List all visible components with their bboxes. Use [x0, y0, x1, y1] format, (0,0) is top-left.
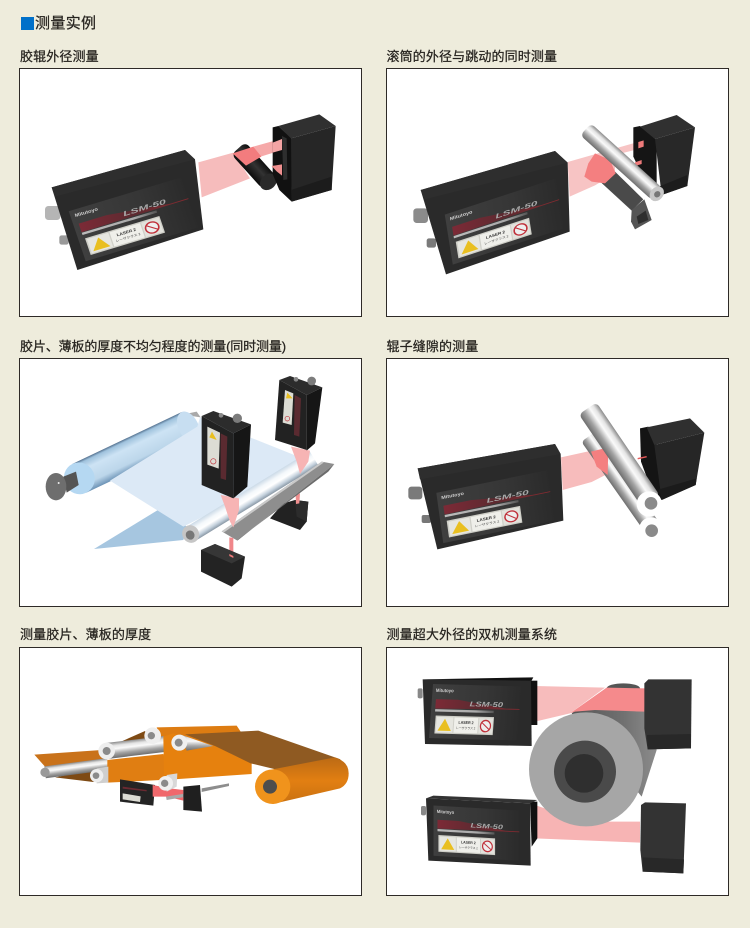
sensor top faceplate [429, 683, 521, 740]
bottom beam [534, 804, 640, 842]
heading: panel 5: 测量胶片、薄板的厚度 [20, 627, 151, 642]
model: LSM-50 [121, 197, 168, 217]
beam overlap [232, 146, 261, 165]
lower film wedge [94, 506, 186, 548]
panel: drum outer diameter and runout [386, 68, 729, 317]
panel: roller gap [386, 358, 729, 607]
roller D [90, 766, 108, 783]
brand: Mitutoyo [441, 491, 464, 501]
connectors [413, 208, 436, 247]
brand: Mitutoyo [436, 808, 454, 815]
film roll [58, 407, 204, 499]
receiver front [200, 544, 244, 586]
brand: Mitutoyo [435, 687, 454, 693]
roller [231, 142, 280, 193]
front beam lower [229, 537, 233, 556]
sensor faceplate [444, 178, 563, 264]
title text: 测量实例 [35, 15, 96, 32]
warning label: レーザクラス 2 [455, 724, 475, 730]
laser beam [198, 138, 282, 197]
panel: film thickness uniformity [19, 358, 362, 607]
sensor bottom faceplate [433, 805, 519, 860]
large cylinder body [571, 684, 656, 796]
roller F [158, 773, 177, 791]
warning label: LASER 2 [485, 229, 505, 239]
upper orange film [156, 725, 244, 753]
roller B [97, 735, 165, 760]
connector top [417, 688, 422, 698]
brown upper sheet [184, 730, 340, 770]
panel: dual sensor large diameter [386, 647, 729, 896]
silver roller [580, 123, 666, 203]
warning label: レーザクラス 2 [114, 231, 141, 243]
connector bottom [420, 806, 426, 815]
roller E [171, 734, 213, 750]
panel: film thickness [19, 647, 362, 896]
heading: panel 1: 胶辊外径测量 [20, 49, 99, 64]
warning label: LASER 2 [115, 227, 137, 237]
heading: panel 6: 测量超大外径的双机测量系统 [386, 627, 557, 642]
model: LSM-50 [469, 700, 503, 709]
warning label [455, 217, 531, 258]
warning label: レーザクラス 2 [474, 518, 499, 528]
beam overlap [584, 153, 615, 183]
sensor front vertical [201, 410, 250, 498]
model: LSM-50 [485, 488, 529, 504]
model: LSM-50 [470, 822, 503, 831]
warning label: LASER 2 [458, 720, 473, 725]
front roller [178, 450, 318, 546]
upper beams [220, 446, 310, 527]
rear beam lower [295, 493, 300, 504]
left film sheet [34, 730, 148, 782]
receiver [633, 114, 694, 194]
title: 测量实例 [21, 15, 96, 32]
back roller cap [638, 517, 662, 541]
sensor body [51, 150, 203, 270]
receiver bottom [640, 802, 686, 873]
sensor rear vertical [274, 376, 322, 450]
brand: Mitutoyo [449, 209, 472, 222]
heading: panel 4: 辊子缝隙的测量 [386, 339, 478, 354]
connectors [408, 486, 430, 522]
back roller [581, 431, 658, 531]
receiver top [644, 679, 691, 749]
brand: Mitutoyo [74, 206, 98, 218]
sensor body [420, 150, 569, 274]
warning label: LASER 2 [476, 514, 496, 522]
front roller cap [636, 491, 662, 516]
small beam [152, 784, 183, 800]
warning label: LASER 2 [461, 840, 475, 845]
warning label: レーザクラス 2 [458, 844, 478, 850]
receiver [272, 114, 335, 201]
sensor faceplate [436, 470, 554, 543]
sensor bottom body [426, 795, 537, 865]
icon: blue square [21, 17, 34, 30]
orange roll [254, 757, 348, 804]
small receiver and shaft [166, 783, 228, 811]
panel: roller outer diameter [19, 68, 362, 317]
receiver [637, 418, 704, 500]
front orange sheet [163, 733, 251, 779]
laser beam [560, 447, 607, 490]
sensor body [417, 444, 563, 549]
receiver rear [270, 500, 308, 530]
top back edge [606, 683, 640, 693]
shaft and knob [45, 471, 78, 500]
pink slot ends [271, 138, 282, 175]
warning label [434, 715, 494, 735]
main orange film [107, 754, 173, 782]
roller C [144, 727, 160, 744]
V block [597, 171, 651, 229]
warning label [85, 216, 165, 255]
beam overlap [590, 447, 608, 474]
heading: panel 2: 滚筒的外径与跳动的同时测量 [386, 49, 557, 64]
top beam [534, 686, 644, 721]
sensor faceplate [68, 177, 198, 261]
warning label [438, 835, 495, 855]
warning label: レーザクラス 2 [483, 233, 508, 245]
sensor top body [422, 677, 537, 746]
heading: panel 3: 胶片、薄板的厚度不均匀程度的测量(同时测量) [20, 339, 286, 354]
film sheet [110, 417, 298, 526]
warning label [446, 505, 522, 537]
blade [221, 461, 334, 540]
roller A [39, 758, 108, 778]
front roller [578, 402, 659, 507]
small sensor [120, 779, 154, 805]
laser beam [567, 140, 644, 196]
cylinder end [528, 712, 642, 826]
connectors [44, 206, 68, 244]
model: LSM-50 [494, 198, 539, 220]
